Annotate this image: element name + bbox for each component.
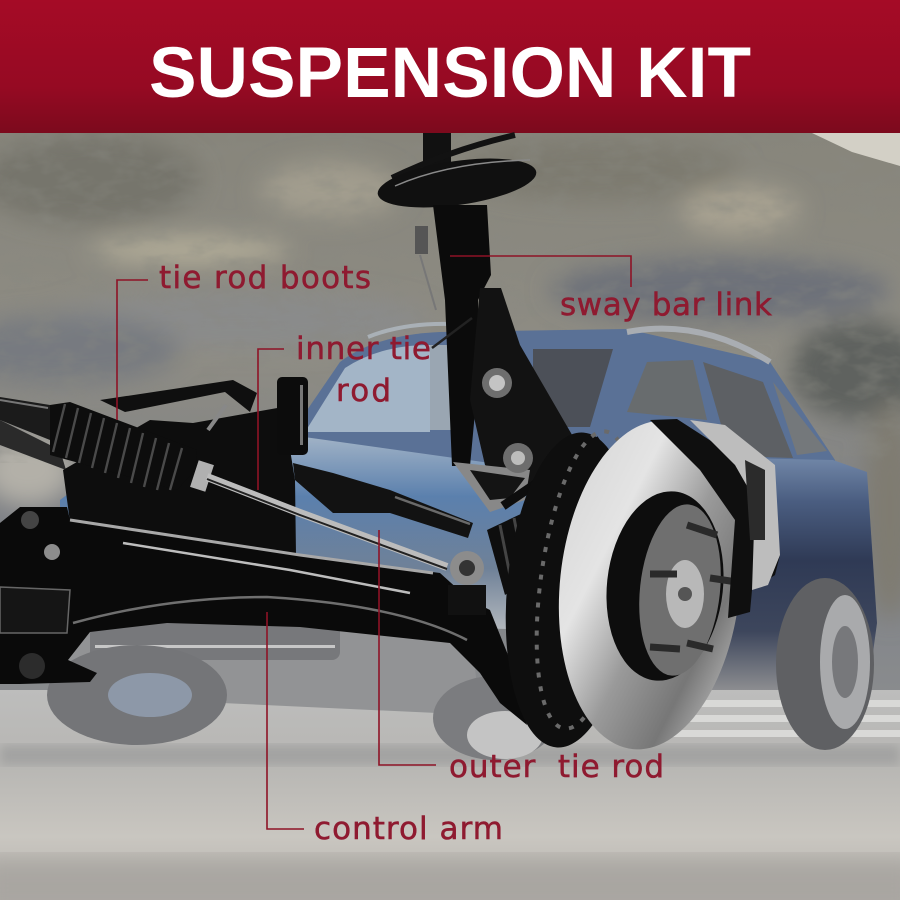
control arm subframe [0,507,527,725]
wheel hub [597,485,733,687]
callout: outer tie rod: outer tie rod [449,749,664,785]
brake caliper [650,419,780,618]
brake rotor [493,411,757,759]
outer boot [487,512,560,595]
roof rail [627,329,770,362]
callout: inner tie rod: inner tie [296,331,431,367]
callout: sway bar link: sway bar link [560,287,772,323]
strut assembly with coil spring [375,133,600,512]
hidden wheel, faded [433,676,557,760]
title banner [0,0,900,133]
rear wheel [776,578,874,750]
steering rack with boot [0,377,308,555]
road stripes [230,697,900,737]
rear body [600,455,877,690]
rail highlights [70,520,433,573]
callout: inner tie rod: rod [336,373,391,409]
side windows [627,360,707,420]
callout: control arm [267,612,503,847]
background photo: road [0,690,900,900]
ball joint [450,551,484,585]
cabin [290,329,840,500]
callout: tie rod boots [117,260,371,420]
background photo: blue SUV [47,324,877,760]
background photo: hills and sky [0,133,900,703]
callout: sway bar link [450,256,772,323]
front wheel, faded [47,645,227,745]
front bumper, faded [60,620,480,715]
callout: inner tie rod [258,331,431,490]
windscreen [305,345,430,432]
title: SUSPENSION KIT [149,34,751,113]
callout: outer tie rod [379,530,664,785]
callout: tie rod boots: tie rod boots [159,260,371,296]
callout: control arm: control arm [314,811,503,847]
hood [60,425,620,630]
rubber boot [50,402,197,490]
strut bolts [482,368,512,398]
front side glass [533,349,613,427]
steering post [277,377,308,455]
grille [90,623,340,660]
inner and outer tie rods [207,463,473,569]
